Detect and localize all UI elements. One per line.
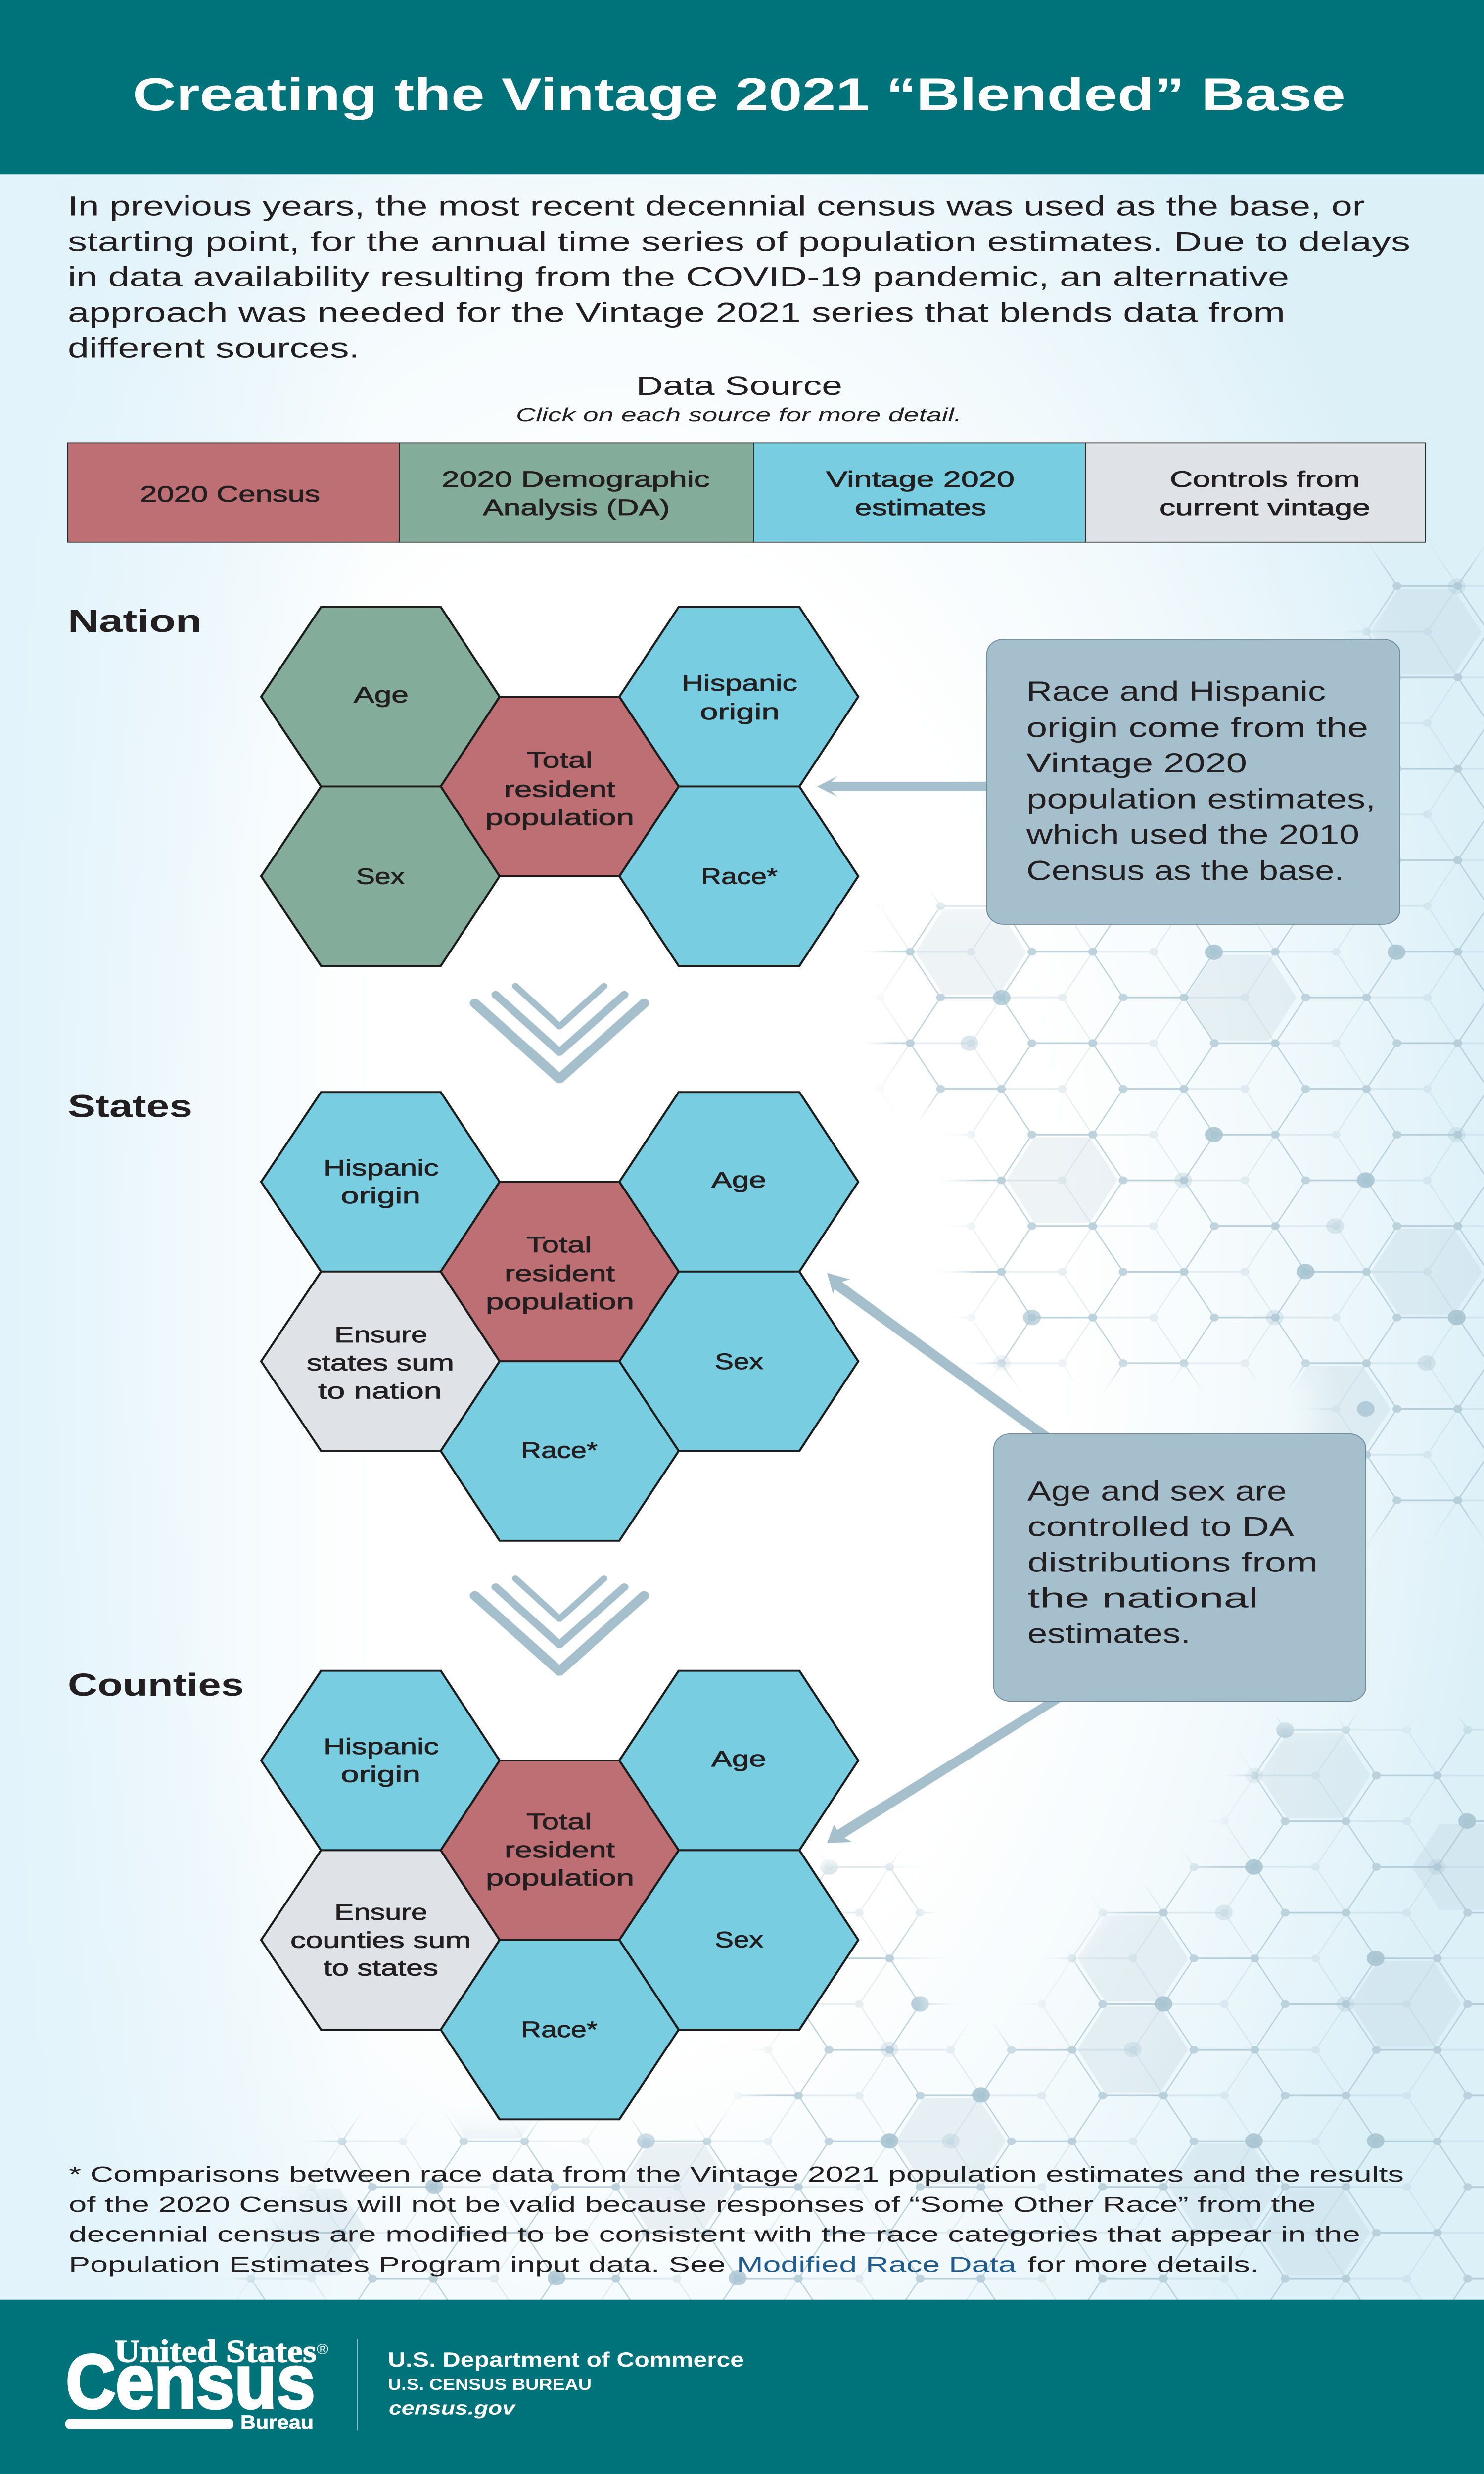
legend: data sources — [68, 443, 1425, 542]
hexagon: Hispanic origin — [619, 607, 858, 786]
legend item: 2020 Demographic Analysis: 2020 Demographic — [442, 467, 710, 492]
hexagon: Race — [441, 1361, 679, 1541]
hexagon: Race: Race* — [521, 1438, 598, 1463]
arrow: age and sex callout to States hexagons — [827, 1273, 1050, 1434]
hexagon: Total resident population: resident — [504, 777, 616, 802]
chevrons: States to Counties — [475, 1578, 644, 1671]
Census Bureau logo: United States — [114, 2333, 317, 2369]
footnote — [69, 2162, 1404, 2277]
hexagon: Age — [619, 1671, 858, 1850]
intro paragraph: in data availability resulting from the COVID-19 pandemic, an alternative — [68, 262, 1289, 292]
hexagon: Total resident population: Total — [527, 748, 593, 772]
intro paragraph: starting point, for the annual time series of population estimates. Due to delays — [68, 227, 1410, 257]
hexagon: Age: Age — [711, 1168, 766, 1192]
hexagon: Ensure states sum to nation: to nation — [318, 1379, 442, 1404]
data source heading: Data Source — [636, 371, 842, 401]
callout: race and Hispanic origin: origin come from the — [1026, 713, 1368, 743]
hexagon group: Nation — [261, 607, 858, 966]
hexagon: Sex — [619, 1850, 858, 2030]
hexagon: Ensure counties sum to states: Ensure — [334, 1900, 427, 1925]
hexagon: Hispanic origin: Hispanic — [682, 671, 797, 696]
footer divider — [357, 2339, 358, 2430]
title: Creating the Vintage 2021 “Blended” Base — [133, 69, 1345, 120]
footnote: for more details. — [1027, 2252, 1259, 2277]
hexagon: Ensure states sum to nation: Ensure — [334, 1323, 427, 1347]
hexagon: Race: Race* — [701, 864, 778, 889]
data source heading — [516, 371, 962, 425]
hexagon: Race: Race* — [521, 2017, 598, 2042]
footnote link: Modified Race Data — [737, 2252, 1017, 2277]
hexagon: Hispanic origin: origin — [341, 1184, 420, 1208]
footer agency text: U.S. CENSUS BUREAU — [388, 2376, 592, 2393]
hexagon: Race — [441, 1940, 679, 2119]
hexagon: Hispanic origin — [261, 1671, 500, 1850]
legend item: Vintage 2020 estimates: Vintage 2020 — [826, 467, 1015, 492]
background hexagon network: upper — [841, 537, 1484, 1545]
legend item: 2020 Census — [68, 443, 399, 542]
callout: race and Hispanic origin — [987, 639, 1400, 924]
hexagon: Total resident population — [441, 697, 679, 876]
hexagon group: Counties — [261, 1671, 858, 2119]
callout: age and sex: Age and sex are — [1027, 1475, 1287, 1506]
hexagon: Total resident population: population — [485, 806, 634, 830]
callout: race and Hispanic origin: which used the 2010 — [1026, 819, 1359, 850]
legend item: Controls from current vintage — [1085, 443, 1425, 542]
heading: Counties: Counties — [68, 1667, 244, 1703]
hexagon: Total resident population — [441, 1182, 679, 1361]
legend item: Vintage 2020 estimates: estimates — [855, 495, 986, 520]
callout: race and Hispanic origin: Race and Hispanic — [1026, 676, 1326, 707]
hexagon: Hispanic origin: origin — [700, 700, 780, 724]
hexagon group: States — [261, 1092, 858, 1541]
footnote: Population Estimates Program input data. See — [69, 2252, 726, 2277]
legend item: 2020 Demographic Analysis: Analysis (DA) — [483, 495, 670, 520]
hexagon: Total resident population: Total — [526, 1233, 592, 1257]
hexagon: Hispanic origin — [261, 1092, 500, 1272]
footer agency text: U.S. Department of Commerce — [388, 2348, 744, 2371]
hexagon: Age: Age — [711, 1747, 766, 1771]
background hexagon network: lower — [198, 1717, 1484, 2301]
heading: States: States — [68, 1088, 192, 1124]
hexagon: Sex — [261, 786, 500, 966]
heading: Nation: Nation — [68, 603, 202, 639]
legend item: Controls from current vintage: current vintage — [1159, 495, 1370, 520]
footer banner — [0, 2300, 1484, 2474]
hexagon: Total resident population: resident — [505, 1838, 615, 1862]
footnote: * Comparisons between race data from the Vintage 2021 population estimates and the results — [69, 2162, 1404, 2186]
footer agency text — [388, 2348, 744, 2419]
callout: age and sex: estimates. — [1027, 1618, 1191, 1649]
hexagon: Sex: Sex — [715, 1349, 763, 1374]
footnote: of the 2020 Census will not be valid because responses of “Some Other Race” from the — [69, 2192, 1316, 2216]
callout: race and Hispanic origin: population estimates, — [1026, 784, 1376, 814]
hexagon: Ensure states sum to nation: states sum — [307, 1351, 454, 1376]
hexagon: Total resident population — [441, 1760, 679, 1940]
hexagon: Race — [619, 786, 858, 966]
hexagon: Ensure counties sum to states: to states — [324, 1956, 438, 1981]
hexagon: Total resident population: population — [486, 1866, 634, 1891]
legend item: Vintage 2020 estimates — [753, 443, 1085, 542]
hexagon: Hispanic origin: Hispanic — [324, 1156, 439, 1181]
hexagon: Sex — [619, 1272, 858, 1451]
legend item: Controls from current vintage: Controls from — [1170, 467, 1360, 492]
Census Bureau logo: Census — [66, 2339, 315, 2425]
data source instruction: Click on each source for more detail. — [516, 404, 962, 425]
hexagon: Age — [261, 607, 500, 786]
footnote: decennial census are modified to be consistent with the race categories that appear in the — [69, 2223, 1360, 2246]
hexagon: Hispanic origin: origin — [341, 1762, 420, 1787]
hexagon: Sex: Sex — [356, 864, 405, 889]
callout: age and sex: controlled to DA — [1027, 1511, 1294, 1542]
intro paragraph: In previous years, the most recent decennial census was used as the base, or — [68, 190, 1365, 222]
hexagon: Total resident population: resident — [505, 1261, 615, 1286]
intro paragraph: approach was needed for the Vintage 2021 series that blends data from — [68, 297, 1285, 328]
hexagon: Age — [619, 1092, 858, 1272]
header banner — [0, 0, 1484, 174]
hexagon: Sex: Sex — [715, 1928, 763, 1952]
legend item: 2020 Demographic Analysis — [399, 443, 753, 542]
hexagon: Total resident population: Total — [526, 1809, 592, 1834]
hexagon: Total resident population: population — [486, 1289, 634, 1314]
Census Bureau logo: ® — [317, 2341, 328, 2357]
hexagon: Ensure states sum to nation — [261, 1272, 500, 1451]
hexagon: Ensure counties sum to states: counties sum — [290, 1928, 471, 1953]
hexagon: Age: Age — [354, 683, 409, 708]
callout: race and Hispanic origin: Vintage 2020 — [1026, 748, 1247, 778]
intro paragraph — [68, 190, 1410, 364]
callout: age and sex — [994, 1434, 1366, 1701]
callout: race and Hispanic origin: Census as the base. — [1026, 856, 1344, 886]
footer agency text: census.gov — [389, 2397, 516, 2419]
callout: age and sex: the national — [1027, 1582, 1258, 1613]
Census Bureau logo: Bureau — [240, 2412, 314, 2433]
chevrons: Nation to States — [475, 986, 644, 1079]
arrow: race and Hispanic origin callout to hexagons — [817, 776, 987, 797]
hexagon: Hispanic origin: Hispanic — [324, 1734, 439, 1759]
callout: age and sex: distributions from — [1027, 1547, 1318, 1577]
hexagon: Ensure counties sum to states — [261, 1850, 500, 2030]
legend item: 2020 Census: 2020 Census — [140, 482, 320, 507]
arrow: age and sex callout to Counties hexagons — [827, 1701, 1062, 1843]
intro paragraph: different sources. — [68, 333, 360, 364]
